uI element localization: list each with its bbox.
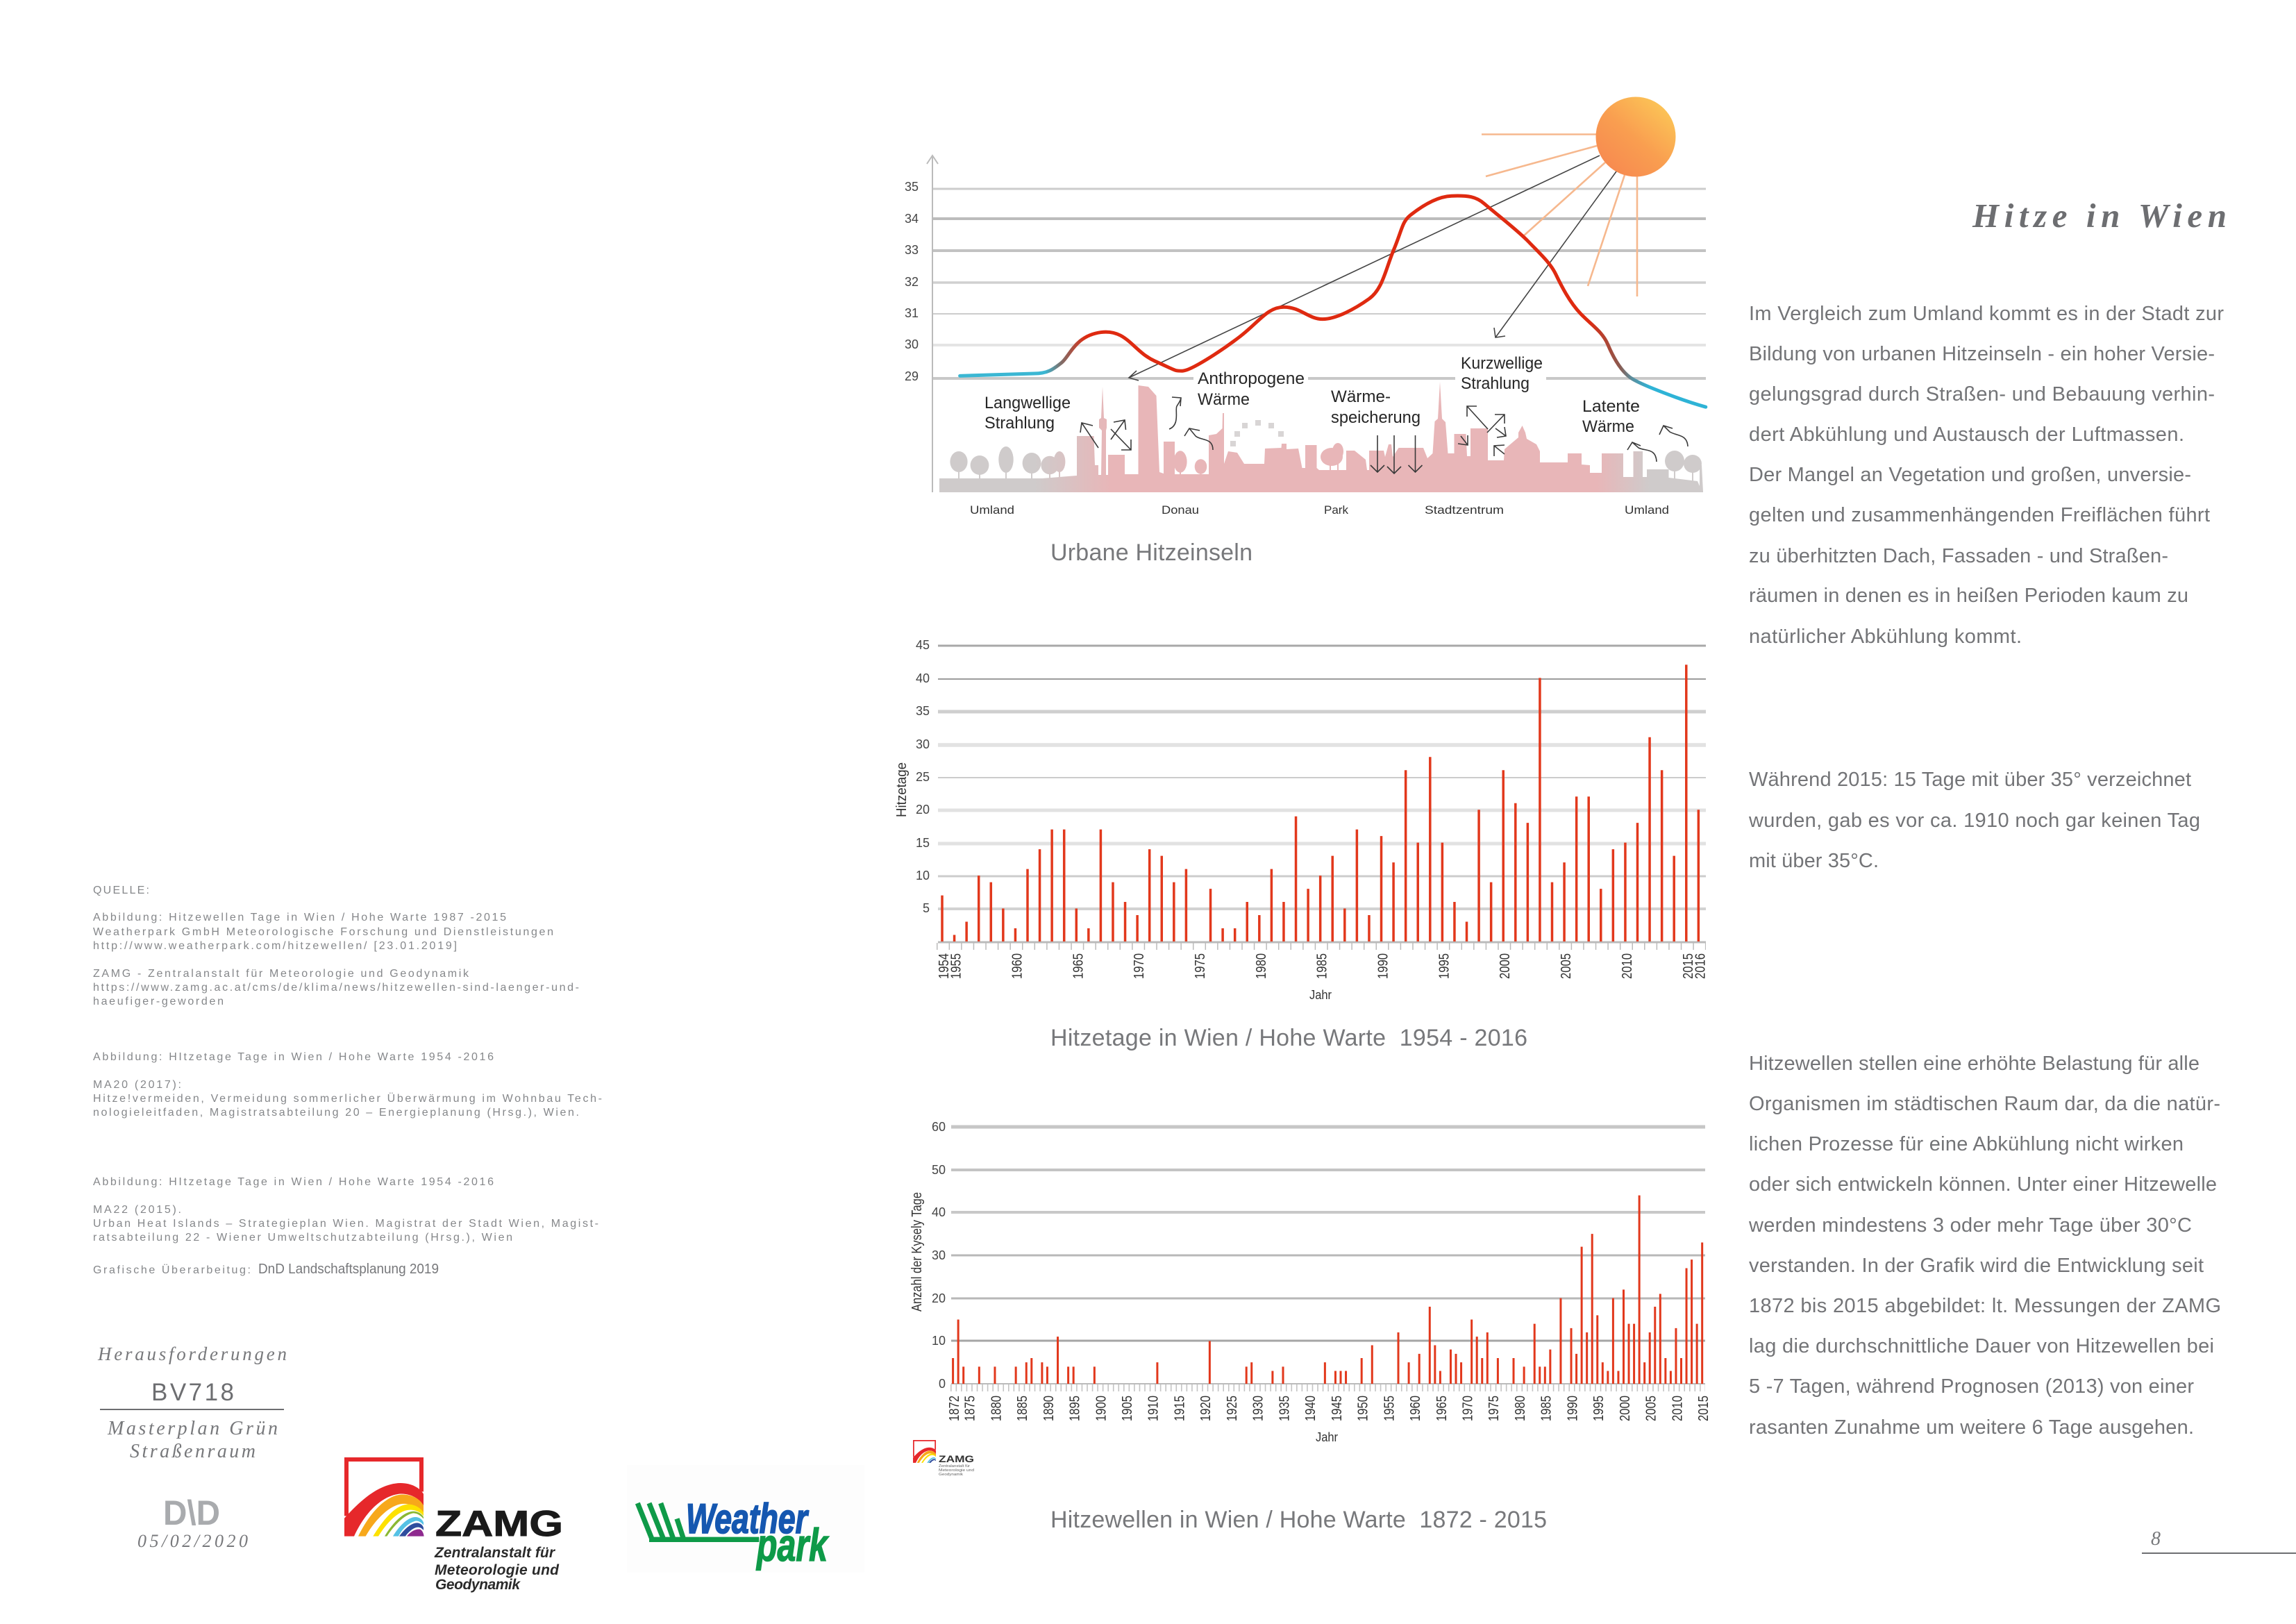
caption: heat days: Hitzetage in Wien / Hohe Warte 1954 - 2016 xyxy=(1050,1025,1527,1051)
long wave radiation arrow xyxy=(1129,156,1600,380)
title block: project: BV718 xyxy=(151,1379,234,1406)
logo: DnD and date xyxy=(137,1493,248,1551)
grid lines xyxy=(950,1127,1705,1388)
location labels xyxy=(970,503,1669,517)
location labels: Umland xyxy=(970,503,1014,517)
x axis years: 1985 xyxy=(1315,953,1330,979)
text block: urban heat islands: Bildung von urbanen Hitzeinseln - ein hoher Versie- xyxy=(1749,343,2215,365)
sources text block: Abbildung: HItzetage Tage in Wien / Hohe Warte 1954 -2016 xyxy=(93,1176,494,1188)
sun rays xyxy=(1482,135,1637,296)
y axis numbers xyxy=(932,1120,946,1391)
text block: heat waves: Organismen im städtischen Raum dar, da die natür- xyxy=(1749,1093,2220,1115)
x axis title: Jahr xyxy=(1309,988,1332,1002)
y axis numbers: 40 xyxy=(932,1205,946,1219)
temperature axis numbers: 30 xyxy=(905,337,919,351)
y axis numbers: 15 xyxy=(916,836,930,850)
title block: project: Straßenraum xyxy=(130,1441,255,1462)
text block: heat waves: lag die durchschnittliche Dauer von Hitzewellen bei xyxy=(1749,1335,2214,1357)
caption: heat waves: Hitzewellen in Wien / Hohe Warte 1872 - 2015 xyxy=(1050,1507,1547,1533)
y axis numbers: 20 xyxy=(916,803,930,817)
process labels: Wärme- xyxy=(1331,387,1391,406)
process labels xyxy=(984,354,1640,436)
small ZAMG logo xyxy=(913,1441,974,1477)
logo: Weatherpark: Weather xyxy=(686,1496,810,1542)
process labels: Strahlung xyxy=(1461,374,1530,393)
text block: heat waves: lichen Prozesse für eine Abkühlung nicht wirken xyxy=(1749,1133,2184,1155)
text block: urban heat islands: gelten und zusammenhängenden Freiflächen führt xyxy=(1749,504,2210,526)
sun xyxy=(1595,97,1676,176)
x axis years: 1985 xyxy=(1539,1396,1555,1421)
logo: ZAMG xyxy=(344,1459,563,1593)
sources text block: DnD Landschaftsplanung 2019 xyxy=(258,1262,439,1277)
caption: urban heat islands: Urbane Hitzeinseln xyxy=(1050,539,1252,566)
x axis years: 1910 xyxy=(1146,1396,1162,1421)
x axis years: 1885 xyxy=(1015,1396,1030,1421)
x axis years: 1935 xyxy=(1277,1396,1292,1421)
text block: 2015 record: Während 2015: 15 Tage mit über 35° verzeichnet xyxy=(1749,769,2191,791)
process labels: Latente xyxy=(1582,397,1640,416)
x axis years: 1980 xyxy=(1254,953,1269,979)
text block: heat waves: 1872 bis 2015 abgebildet: lt. Messungen der ZAMG xyxy=(1749,1295,2221,1317)
title block: project: Herausforderungen xyxy=(97,1343,287,1364)
text block: urban heat islands: natürlicher Abkühlung kommt. xyxy=(1749,626,2022,648)
ferris wheel dots xyxy=(1230,420,1284,446)
text block: heat waves: verstanden. In der Grafik wird die Entwicklung seit xyxy=(1749,1255,2204,1277)
temperature axis numbers: 33 xyxy=(905,243,919,257)
sources text block: Weatherpark GmbH Meteorologische Forschung und Dienstleistungen xyxy=(93,926,553,938)
sources text block: haeufiger-geworden xyxy=(93,996,224,1007)
x axis years: 2005 xyxy=(1559,953,1574,979)
process labels: Strahlung xyxy=(984,414,1055,433)
location labels: Donau xyxy=(1162,503,1199,517)
y axis numbers: 40 xyxy=(916,671,930,685)
x axis years: 1995 xyxy=(1436,953,1452,979)
location labels: Stadtzentrum xyxy=(1425,503,1504,517)
sources text block: Urban Heat Islands – Strategieplan Wien. Magistrat der Stadt Wien, Magist- xyxy=(93,1218,598,1230)
y axis numbers: 35 xyxy=(916,704,930,718)
sources text block: ZAMG - Zentralanstalt für Meteorologie und Geodynamik xyxy=(93,968,469,980)
chart: urban heat islands xyxy=(905,97,1706,517)
y axis numbers: 5 xyxy=(923,901,930,915)
text block: heat waves xyxy=(1748,1053,2221,1439)
x axis years: 1955 xyxy=(949,953,964,979)
x axis years: 1975 xyxy=(1193,953,1208,979)
x axis years: 1905 xyxy=(1120,1396,1135,1421)
title block: project xyxy=(97,1343,287,1462)
text block: 2015 record: wurden, gab es vor ca. 1910 noch gar keinen Tag xyxy=(1748,810,2200,832)
x axis years: 1950 xyxy=(1356,1396,1371,1421)
sources text block: https://www.zamg.ac.at/cms/de/klima/news/hitzewellen-sind-laenger-und- xyxy=(93,982,579,994)
temperature axis numbers: 34 xyxy=(905,212,919,226)
temperature axis numbers xyxy=(905,180,919,383)
grid lines xyxy=(937,646,1706,946)
x axis years: 1955 xyxy=(1382,1396,1397,1421)
text block: urban heat islands: zu überhitzten Dach, Fassaden - und Straßen- xyxy=(1749,545,2168,567)
x axis years: 1970 xyxy=(1461,1396,1476,1421)
x axis years: 1915 xyxy=(1172,1396,1187,1421)
logo: DnD and date: D\D xyxy=(163,1493,220,1532)
x axis years: 1940 xyxy=(1303,1396,1318,1421)
x axis years: 2000 xyxy=(1498,953,1513,979)
x axis years: 1872 xyxy=(947,1396,962,1421)
x axis years: 1960 xyxy=(1009,953,1025,979)
bars xyxy=(953,1196,1702,1384)
logo: ZAMG: Geodynamik xyxy=(435,1577,521,1593)
text block: urban heat islands: Der Mangel an Vegetation und großen, unversie- xyxy=(1749,464,2191,486)
text block: urban heat islands: Im Vergleich zum Umland kommt es in der Stadt zur xyxy=(1749,303,2224,325)
text block: heat waves: 5 -7 Tagen, während Prognosen (2013) von einer xyxy=(1749,1375,2194,1398)
sources text block xyxy=(93,885,602,1277)
process labels: Anthropogene xyxy=(1198,369,1305,388)
chart: heat waves 1872-2015 xyxy=(910,1120,1711,1477)
y axis numbers: 10 xyxy=(916,869,930,882)
city skyline xyxy=(939,382,1703,492)
small ZAMG logo: Zentralanstalt für xyxy=(939,1464,970,1468)
x axis years: 2000 xyxy=(1618,1396,1633,1421)
x axis years: 1890 xyxy=(1041,1396,1057,1421)
process labels: Wärme xyxy=(1198,390,1250,409)
process labels: speicherung xyxy=(1331,408,1421,427)
x axis years: 2016 xyxy=(1693,953,1708,979)
temperature scale grid xyxy=(927,156,1706,492)
x axis years: 2010 xyxy=(1620,953,1635,979)
temperature axis numbers: 35 xyxy=(905,180,919,194)
y axis numbers: 10 xyxy=(932,1334,946,1348)
y axis numbers: 50 xyxy=(932,1163,946,1177)
x axis years: 2005 xyxy=(1644,1396,1659,1421)
y axis numbers: 30 xyxy=(916,737,930,751)
chart: heat days 1954-2016 xyxy=(894,638,1708,1002)
sources text block: Hitze!vermeiden, Vermeidung sommerlicher Überwärmung im Wohnbau Tech- xyxy=(93,1092,602,1105)
text block: urban heat islands xyxy=(1749,303,2224,648)
y axis numbers: 0 xyxy=(939,1377,946,1391)
x axis years: 1965 xyxy=(1071,953,1086,979)
temperature axis numbers: 32 xyxy=(905,275,919,289)
small ZAMG logo: Geodynamik xyxy=(939,1473,963,1477)
y axis numbers: 30 xyxy=(932,1248,946,1262)
sources text block: http://www.weatherpark.com/hitzewellen/ [23.01.2019] xyxy=(93,940,457,952)
x axis years: 1990 xyxy=(1376,953,1391,979)
x axis years: 2010 xyxy=(1670,1396,1685,1421)
logo: ZAMG: Zentralanstalt für xyxy=(434,1545,556,1561)
location labels: Park xyxy=(1324,503,1348,517)
x axis years: 1980 xyxy=(1513,1396,1528,1421)
x axis years: 1875 xyxy=(963,1396,978,1421)
x axis years: 1970 xyxy=(1132,953,1147,979)
y axis numbers: 25 xyxy=(916,770,930,784)
small ZAMG logo: ZAMG xyxy=(939,1453,974,1464)
process labels: Kurzwellige xyxy=(1461,354,1543,373)
title block: project: Masterplan Grün xyxy=(107,1418,278,1439)
text block: heat waves: oder sich entwickeln können. Unter einer Hitzewelle xyxy=(1749,1173,2217,1196)
small heat arrows xyxy=(1080,397,1688,474)
logo: Weatherpark: park xyxy=(756,1519,829,1571)
temperature axis numbers: 31 xyxy=(905,306,919,320)
sources text block: ratsabteilung 22 - Wiener Umweltschutzabteilung (Hrsg.), Wien xyxy=(93,1232,512,1244)
y axis title: Hitzetage xyxy=(894,762,910,817)
x axis years: 1965 xyxy=(1434,1396,1450,1421)
x axis years: 2015 xyxy=(1696,1396,1711,1421)
x axis years: 1954 xyxy=(937,953,952,979)
x axis years: 2015 xyxy=(1681,953,1696,979)
logo: ZAMG: ZAMG xyxy=(435,1504,563,1544)
sources text block: MA20 (2017): xyxy=(93,1079,181,1091)
location labels: Umland xyxy=(1625,503,1669,517)
sources text block: Abbildung: Hitzewellen Tage in Wien / Hohe Warte 1987 -2015 xyxy=(93,912,506,923)
text block: urban heat islands: dert Abkühlung und Austausch der Luftmassen. xyxy=(1749,424,2184,446)
text block: heat waves: werden mindestens 3 oder mehr Tage über 30°C xyxy=(1748,1214,2192,1237)
x axis years: 1925 xyxy=(1225,1396,1240,1421)
short wave radiation arrow xyxy=(1494,171,1616,337)
x axis years: 1990 xyxy=(1565,1396,1580,1421)
logo: DnD and date: 05/02/2020 xyxy=(137,1531,248,1551)
text block: urban heat islands: räumen in denen es in heißen Perioden kaum zu xyxy=(1749,585,2188,607)
sources text block: MA22 (2015). xyxy=(93,1204,181,1216)
logo: Weatherpark xyxy=(637,1496,829,1571)
x axis years: 1930 xyxy=(1251,1396,1266,1421)
x axis years: 1880 xyxy=(989,1396,1004,1421)
x axis years xyxy=(947,1396,1711,1421)
bars xyxy=(942,664,1698,941)
sources text block: nologieleitfaden, Magistratsabteilung 20 – Energieplanung (Hrsg.), Wien. xyxy=(93,1107,579,1119)
text block: 2015 record: mit über 35°C. xyxy=(1749,850,1879,872)
text block: urban heat islands: gelungsgrad durch Straßen- und Bebauung verhin- xyxy=(1749,383,2215,405)
temperature axis numbers: 29 xyxy=(905,369,919,383)
page number: 8 xyxy=(2151,1528,2161,1550)
sources text block: Grafische Überarbeitug: xyxy=(93,1264,251,1276)
sources text block: QUELLE: xyxy=(93,885,149,896)
x axis title: Jahr xyxy=(1316,1430,1338,1444)
process labels: Wärme xyxy=(1582,417,1634,436)
text block: heat waves: Hitzewellen stellen eine erhöhte Belastung für alle xyxy=(1749,1053,2199,1075)
x axis years: 1895 xyxy=(1068,1396,1083,1421)
x axis years: 1900 xyxy=(1093,1396,1109,1421)
sources text block: Abbildung: HItzetage Tage in Wien / Hohe Warte 1954 -2016 xyxy=(93,1051,494,1063)
y axis title: Anzahl der Kysely Tage xyxy=(910,1192,925,1312)
y axis numbers xyxy=(916,638,930,915)
y axis numbers: 60 xyxy=(932,1120,946,1134)
x axis years: 1995 xyxy=(1591,1396,1607,1421)
y axis numbers: 20 xyxy=(932,1291,946,1305)
x axis years xyxy=(937,953,1708,979)
text block: heat waves: rasanten Zunahme um weitere 6 Tage ausgehen. xyxy=(1749,1416,2194,1439)
x axis years: 1945 xyxy=(1330,1396,1345,1421)
x axis years: 1920 xyxy=(1198,1396,1214,1421)
y axis numbers: 45 xyxy=(916,638,930,652)
process labels: Langwellige xyxy=(984,394,1071,412)
heading: Hitze in Wien: Hitze in Wien xyxy=(1972,196,2227,235)
text block: 2015 record xyxy=(1748,769,2200,872)
small ZAMG logo: Meteorologie und xyxy=(939,1468,974,1473)
x axis years: 1960 xyxy=(1408,1396,1423,1421)
temperature curve xyxy=(960,196,1706,407)
logo: ZAMG: Meteorologie und xyxy=(435,1562,560,1578)
x axis years: 1975 xyxy=(1486,1396,1502,1421)
